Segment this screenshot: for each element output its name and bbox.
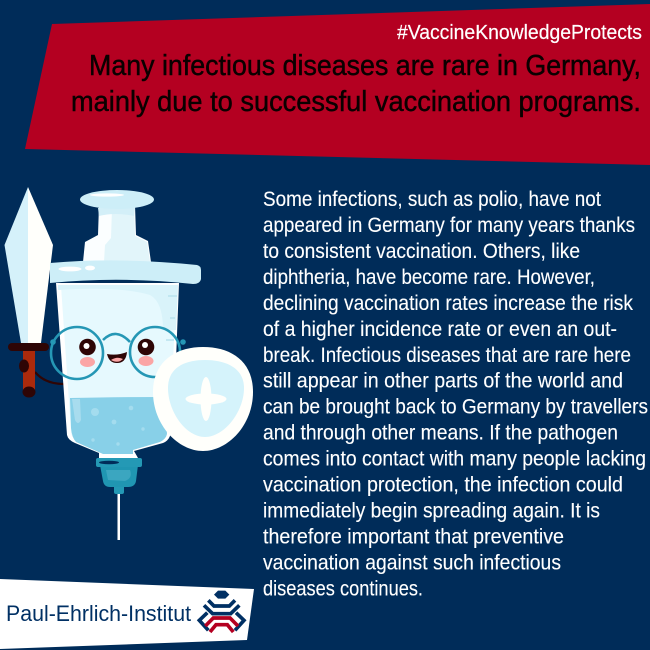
body text: diseases continues.: [263, 578, 423, 600]
illustration: syringe character: [4, 187, 253, 540]
hashtag: #VaccineKnowledgeProtects: [397, 21, 642, 44]
logo wordmark: Paul-Ehrlich-Institut: [6, 601, 192, 626]
icon: shield: [153, 347, 253, 451]
syringe flange: [50, 260, 201, 284]
syringe barrel: [56, 283, 179, 458]
syringe cap and needle: [96, 458, 142, 540]
logo emblem: [199, 591, 244, 632]
body text: vaccination against such infectious: [263, 552, 561, 574]
body text: to consistent vaccination. Others, like: [263, 240, 580, 263]
body text: vaccination protection, the infection could: [263, 474, 623, 496]
body text: [263, 188, 648, 600]
body text: and through other means. If the pathogen: [263, 422, 618, 444]
body text: diphtheria, have become rare. However,: [263, 266, 595, 289]
glasses: [50, 327, 186, 379]
body text: still appear in other parts of the world and: [263, 370, 623, 392]
measurement ticks: [166, 296, 177, 340]
face: eyes, cheeks, mouth: [79, 339, 154, 367]
icon: sword: [4, 187, 64, 398]
logo panel: [0, 579, 254, 649]
body text: Some infections, such as polio, have not: [263, 188, 601, 211]
syringe plunger: [80, 190, 154, 262]
liquid: [70, 397, 167, 454]
body text: immediately begin spreading again. It is: [263, 500, 600, 522]
body text: of a higher incidence rate or even an out-: [263, 318, 617, 341]
title: [71, 50, 641, 118]
body text: therefore important that preventive: [263, 526, 564, 548]
header banner: [25, 4, 650, 165]
